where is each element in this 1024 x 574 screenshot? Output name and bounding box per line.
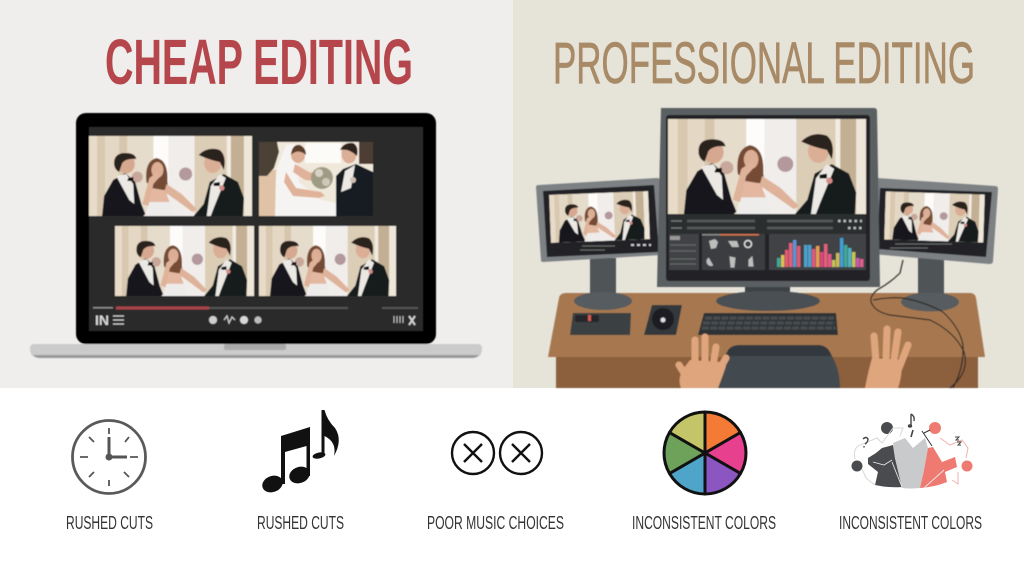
laptop base bbox=[30, 344, 482, 358]
player controls bbox=[95, 312, 415, 328]
effects panel bbox=[702, 234, 765, 270]
timeline bbox=[93, 306, 418, 310]
video thumbnail 1 bbox=[89, 136, 252, 216]
main monitor bbox=[657, 108, 880, 311]
main monitor video bbox=[668, 119, 866, 214]
player controls: IN bbox=[95, 312, 109, 328]
video thumbnail 4 bbox=[259, 226, 396, 296]
icon: colour wheel bbox=[664, 412, 746, 494]
laptop illustration bbox=[30, 113, 482, 358]
keyboard bbox=[698, 313, 838, 335]
video thumbnail 3 bbox=[115, 226, 254, 296]
bottom strip background bbox=[0, 388, 1024, 574]
right panel background bbox=[513, 0, 1024, 388]
video thumbnail 2 bbox=[259, 142, 373, 216]
chair bbox=[718, 345, 840, 388]
laptop body bbox=[76, 113, 436, 344]
right monitor bbox=[869, 178, 998, 312]
desk setup illustration bbox=[536, 108, 998, 388]
colour histogram bbox=[769, 234, 866, 270]
right hand bbox=[865, 329, 908, 388]
cables bbox=[871, 260, 965, 388]
title: cheap editing: CHEAP EDITING bbox=[105, 26, 413, 98]
label: rushed cuts: RUSHED CUTS bbox=[257, 513, 344, 533]
editing timeline rows bbox=[668, 214, 866, 234]
label: inconsistent colors: INCONSISTENT COLORS bbox=[632, 513, 776, 533]
icon: two crossed circles bbox=[452, 432, 542, 474]
desk front bbox=[556, 356, 978, 388]
icon: music notes bbox=[260, 410, 339, 495]
desk top bbox=[548, 293, 985, 357]
control pad bbox=[570, 313, 631, 335]
side panel bbox=[669, 234, 699, 270]
jog wheel bbox=[644, 305, 682, 335]
label: rushed cuts: RUSHED CUTS bbox=[66, 513, 153, 533]
label: poor music choices: POOR MUSIC CHOICES bbox=[427, 513, 564, 533]
laptop screen bbox=[89, 127, 423, 331]
left hand bbox=[679, 337, 726, 388]
icon: clock bbox=[72, 420, 146, 494]
left panel background bbox=[0, 0, 513, 388]
left monitor bbox=[536, 178, 664, 310]
icon: mismatched couple silhouettes bbox=[852, 414, 972, 488]
